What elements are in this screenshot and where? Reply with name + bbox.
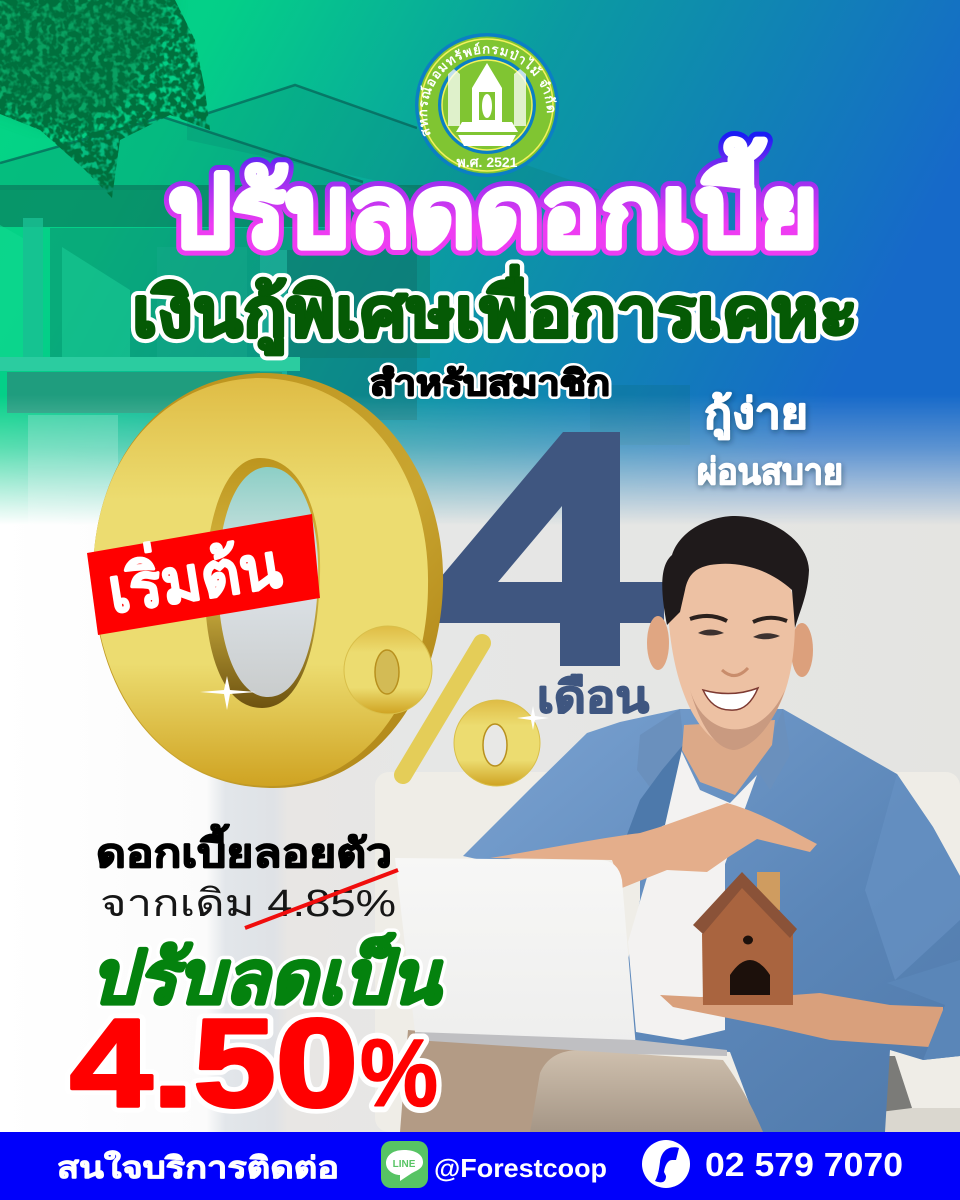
red badge: starting from: เริ่มต้น bbox=[102, 522, 286, 627]
lower hand and forearm bbox=[660, 993, 943, 1048]
text: new rate: % bbox=[360, 1020, 438, 1127]
tree leaves top left bbox=[0, 0, 210, 198]
text: reduced to: ปรับลดเป็น bbox=[90, 933, 443, 1019]
tagline: easy loan: กู้ง่าย bbox=[704, 390, 808, 440]
icon: phone bbox=[642, 1140, 690, 1188]
subheading: for members: สำหรับสมาชิก bbox=[370, 364, 610, 403]
hair bbox=[662, 516, 809, 628]
eyes bbox=[698, 630, 780, 639]
text: from original rate struck through bbox=[100, 870, 398, 928]
zero hole opening bbox=[218, 467, 318, 697]
shirt cuff bbox=[887, 960, 960, 1060]
shirt body and sleeves bbox=[463, 709, 960, 1132]
icon: LINE bbox=[381, 1141, 428, 1188]
title: main heading: ปรับลดดอกเบี้ย bbox=[168, 138, 818, 268]
text: new rate: 4.50 bbox=[70, 994, 358, 1133]
left thigh bbox=[400, 1030, 640, 1132]
collar bbox=[637, 709, 790, 790]
subheading: for members: สำหรับสมาชิก bbox=[370, 364, 610, 403]
upper arm and hand over house bbox=[490, 803, 817, 888]
shirt right fold bbox=[865, 774, 960, 980]
near thigh bbox=[530, 1050, 763, 1132]
neck bbox=[682, 720, 775, 795]
text: new rate bbox=[70, 994, 438, 1133]
eyebrows bbox=[690, 616, 787, 622]
face bbox=[668, 556, 795, 748]
tagline: easy loan: ผ่อนสบาย bbox=[697, 451, 843, 492]
footer: phone number: 02 579 7070 bbox=[705, 1146, 903, 1183]
text: from original rate struck through: จากเดิม 4.85% bbox=[100, 883, 396, 925]
zero hole bevel bbox=[205, 458, 320, 708]
big gold zero with percent bbox=[93, 373, 549, 788]
laptop bbox=[395, 858, 636, 1048]
subtitle: special housing loan: เงินกู้พิเศษเพื่อการเคหะ bbox=[132, 264, 858, 356]
title: main heading: ปรับลดดอกเบี้ย bbox=[168, 138, 818, 268]
red badge: starting from bbox=[87, 514, 320, 635]
label: months: เดือน bbox=[537, 673, 649, 722]
ears bbox=[647, 616, 669, 670]
logo: cooperative seal: พ.ศ. 2521 bbox=[457, 154, 518, 170]
text: new rate: 4.50 bbox=[70, 994, 358, 1133]
zero face bbox=[93, 378, 428, 786]
percent circle left bbox=[344, 626, 432, 714]
wooden house bbox=[693, 872, 797, 1005]
zero extrusion bbox=[93, 373, 443, 788]
footer: contact label: สนใจบริการติดต่อ bbox=[57, 1150, 339, 1185]
white tee bbox=[628, 750, 757, 1040]
text: floating interest rate: ดอกเบี้ยลอยตัว bbox=[96, 824, 392, 876]
logo: cooperative seal bbox=[415, 33, 559, 177]
sparkles bbox=[200, 676, 549, 730]
big number 4 bbox=[430, 432, 664, 666]
nose bbox=[722, 668, 748, 676]
footer: LINE handle: @Forestcoop bbox=[434, 1153, 607, 1183]
house silhouette background bbox=[0, 85, 690, 525]
sofa seat and cushion bbox=[880, 1108, 960, 1132]
percent slash bbox=[403, 643, 482, 775]
text: reduced to: ปรับลดเป็น bbox=[90, 933, 443, 1019]
subtitle: special housing loan: เงินกู้พิเศษเพื่อการเคหะ bbox=[132, 264, 858, 356]
text: new rate: % bbox=[360, 1020, 438, 1127]
icon: LINE: LINE bbox=[393, 1159, 416, 1170]
man photo illustration bbox=[395, 516, 960, 1132]
logo: cooperative seal: สหกรณ์ออมทรัพย์กรมป่าไม้ จำกัด bbox=[420, 42, 557, 136]
footer contact bar bbox=[0, 1132, 960, 1200]
percent circle right bbox=[454, 700, 540, 786]
smile bbox=[703, 688, 758, 710]
tagline: easy loan bbox=[697, 390, 843, 492]
